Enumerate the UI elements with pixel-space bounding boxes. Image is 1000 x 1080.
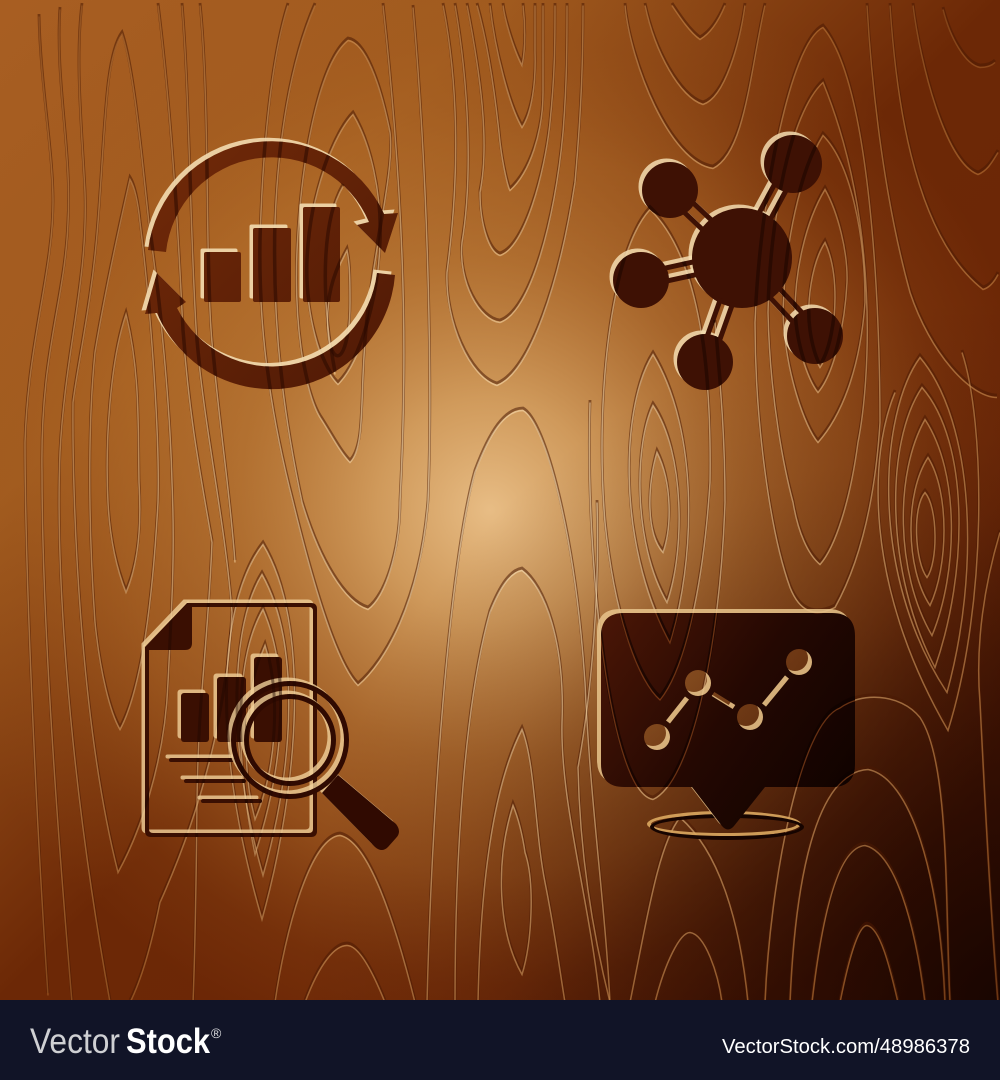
document outline [145, 603, 317, 837]
bar: medium [253, 228, 291, 302]
logo wordmark [30, 1022, 222, 1061]
bar: short [204, 252, 241, 302]
speech bubble with chart cut-outs [601, 613, 855, 830]
document text lines [169, 758, 262, 803]
refresh arrow: bottom [145, 273, 395, 389]
bar: tall [303, 207, 340, 302]
icon: bar chart inside refresh arrows [142, 138, 398, 390]
image id: VectorStock.com/48986378 [722, 1036, 970, 1058]
pin base ring [650, 814, 804, 840]
refresh arrow: top [148, 141, 398, 253]
document bar chart [181, 657, 282, 742]
icon: network molecule [610, 132, 843, 390]
icon: document with chart under magnifier [142, 600, 399, 850]
footer bar [0, 1000, 1000, 1080]
logo wordmark: ® [211, 1025, 222, 1041]
logo wordmark: Stock [126, 1022, 210, 1061]
logo wordmark: Vector [30, 1022, 120, 1061]
magnifying glass [231, 681, 399, 850]
icon: speech bubble pin with line chart [597, 609, 855, 840]
